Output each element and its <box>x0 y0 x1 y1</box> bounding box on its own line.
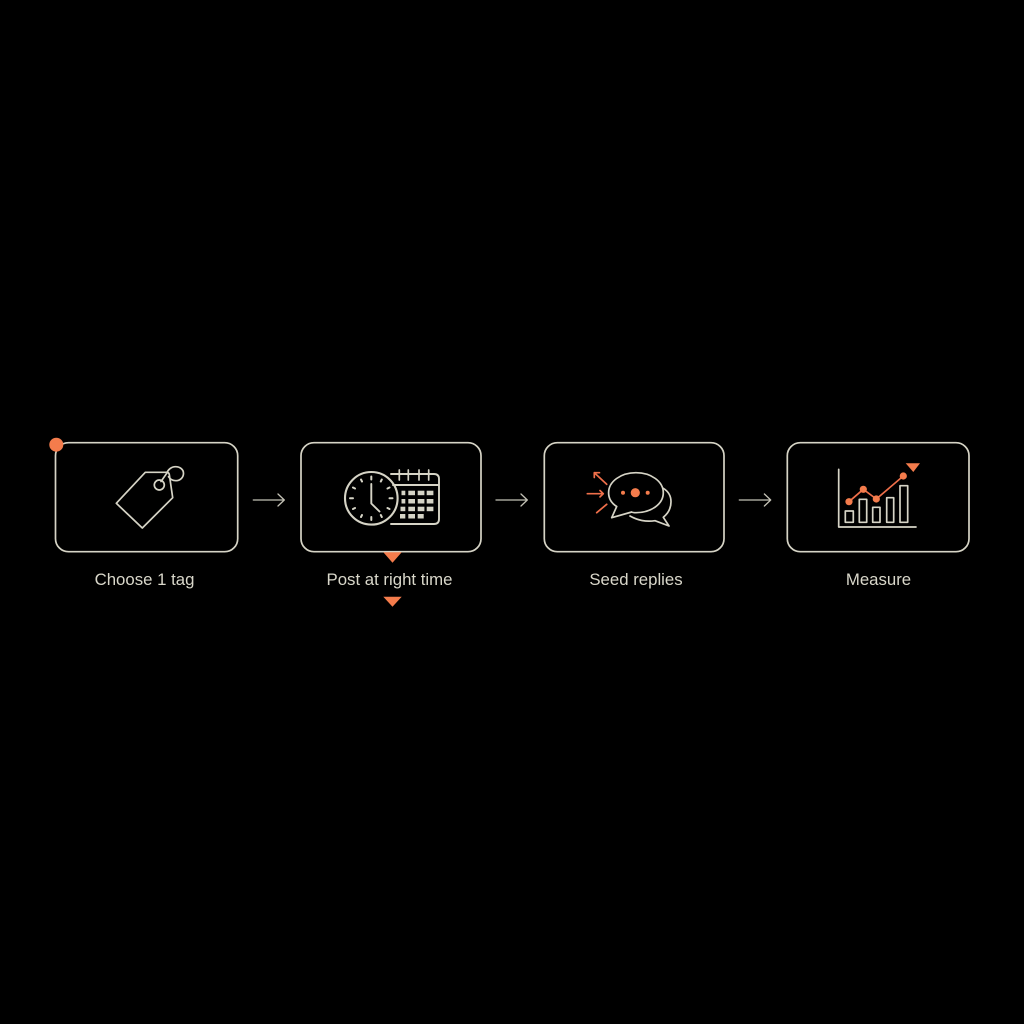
icon: speech bubbles <box>609 473 671 526</box>
card frame 3 <box>544 443 724 552</box>
icon: calendar <box>391 470 439 524</box>
marker: lower orange triangle <box>383 597 402 607</box>
icon: orange start dot <box>49 438 63 452</box>
panel: step 1 choose tag <box>49 438 238 589</box>
icon: price tag <box>116 467 184 528</box>
panel: step 3 seed replies <box>544 443 724 589</box>
icon: bar chart <box>839 469 916 527</box>
icon: orange trend line <box>845 472 907 505</box>
label: measure: Measure <box>846 570 911 589</box>
icon: orange dots <box>621 488 650 497</box>
arrow: step 2 to step 3 <box>496 494 527 506</box>
label: seed replies: Seed replies <box>589 570 683 589</box>
card frame 4 <box>787 443 969 552</box>
panel: step 2 post at right time <box>301 443 481 607</box>
icon: orange seed arrows <box>587 473 607 513</box>
label: post at right time: Post at right time <box>327 570 452 589</box>
card frame 2 <box>301 443 481 552</box>
marker: orange triangle <box>906 463 920 472</box>
panel: step 4 measure <box>787 443 969 589</box>
marker: upper orange triangle <box>383 552 402 563</box>
label: choose 1 tag: Choose 1 tag <box>95 570 194 589</box>
arrow: step 3 to step 4 <box>739 494 771 506</box>
icon: clock <box>345 472 398 525</box>
arrow: step 1 to step 2 <box>253 494 284 506</box>
card frame 1 <box>56 443 238 552</box>
